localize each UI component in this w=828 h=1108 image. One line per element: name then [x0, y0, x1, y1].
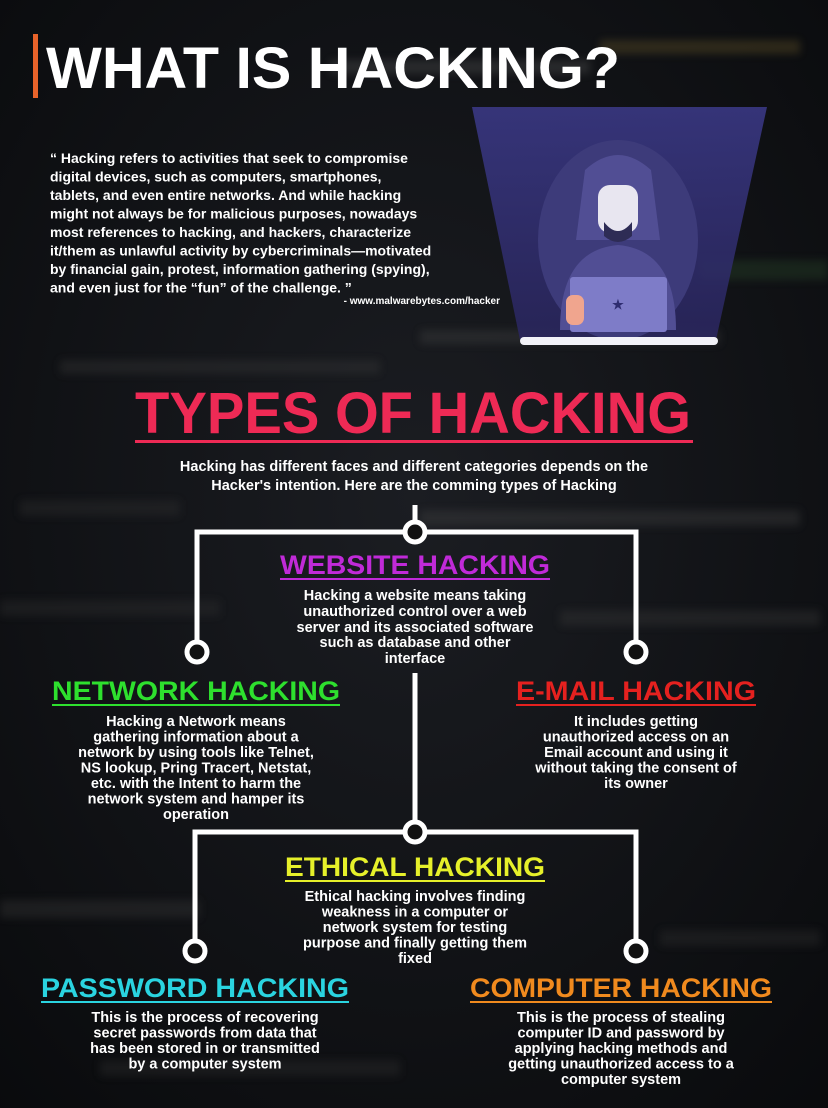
panel: network hacking: network by using tools like Telnet, — [78, 745, 314, 761]
text block: definition quote: and even just for the “fun” of the challenge. ” — [50, 280, 352, 296]
panel: network hacking: Hacking a Network means — [106, 714, 286, 730]
panel: network hacking: NETWORK HACKING — [52, 676, 340, 706]
text block: definition quote: it/them as unlawful activity by cybercriminals—motivated — [50, 242, 431, 258]
panel: password hacking: by a computer system — [128, 1056, 282, 1072]
panel: network hacking — [52, 676, 340, 823]
panel: network hacking: network system and hamper its — [88, 792, 304, 808]
connector tree: top — [187, 505, 646, 821]
icon: hooded hacker with laptop: ★ — [612, 297, 624, 312]
title: what is hacking: WHAT IS HACKING? — [46, 36, 620, 101]
panel: ethical hacking: Ethical hacking involves finding — [305, 889, 525, 905]
panel: e-mail hacking: It includes getting — [574, 714, 698, 730]
heading: types of hacking: TYPES OF HACKING — [135, 381, 691, 446]
source citation: - www.malwarebytes.com/hacker — [344, 296, 500, 307]
panel: website hacking: server and its associated software — [297, 620, 533, 636]
panel: password hacking: PASSWORD HACKING — [41, 973, 349, 1003]
panel: network hacking: NS lookup, Pring Tracert, Netstat, — [81, 760, 311, 776]
text block: intro — [180, 459, 648, 494]
panel: e-mail hacking: E-MAIL HACKING — [516, 676, 756, 706]
panel: website hacking: unauthorized control over a web — [303, 604, 527, 620]
panel: ethical hacking — [285, 852, 545, 967]
panel: ethical hacking: fixed — [398, 951, 432, 967]
panel: password hacking: This is the process of recovering — [91, 1010, 319, 1026]
text block: definition quote: digital devices, such as computers, smartphones, — [50, 168, 381, 184]
panel: e-mail hacking: without taking the consent of — [534, 760, 737, 776]
text block: definition quote: most references to hacking, and hackers, characterize — [50, 224, 411, 240]
text block: intro: Hacker's intention. Here are the comming types of Hacking — [211, 478, 617, 494]
icon: hooded hacker with laptop — [472, 107, 767, 345]
panel: network hacking: operation — [163, 807, 229, 823]
panel: website hacking — [280, 550, 550, 667]
panel: computer hacking: This is the process of stealing — [517, 1010, 725, 1026]
panel: ethical hacking: network system for testing — [323, 920, 507, 936]
panel: password hacking: secret passwords from data that — [93, 1026, 317, 1042]
text block: definition quote: might not always be for malicious purposes, nowadays — [50, 206, 417, 222]
text block: definition quote — [50, 150, 500, 307]
panel: ethical hacking: purpose and finally getting them — [303, 936, 527, 952]
panel: computer hacking: computer ID and password by — [517, 1026, 725, 1042]
panel: computer hacking: COMPUTER HACKING — [470, 973, 772, 1003]
panel: computer hacking — [470, 973, 772, 1088]
panel: computer hacking: applying hacking methods and — [515, 1041, 727, 1057]
panel: website hacking: such as database and other — [320, 635, 511, 651]
panel: website hacking: interface — [385, 651, 445, 667]
panel: computer hacking: getting unauthorized access to a — [508, 1056, 735, 1072]
panel: e-mail hacking: Email account and using it — [544, 745, 728, 761]
panel: ethical hacking: weakness in a computer or — [321, 904, 508, 920]
panel: password hacking — [41, 973, 349, 1072]
text block: definition quote: by financial gain, protest, information gathering (spying), — [50, 261, 430, 277]
panel: website hacking: WEBSITE HACKING — [280, 550, 550, 580]
panel: e-mail hacking: its owner — [604, 776, 668, 792]
text block: definition quote: “ Hacking refers to activities that seek to compromise — [50, 150, 408, 166]
panel: ethical hacking: ETHICAL HACKING — [285, 852, 545, 882]
panel: password hacking: has been stored in or transmitted — [90, 1041, 320, 1057]
panel: e-mail hacking — [516, 676, 756, 792]
panel: network hacking: gathering information about a — [93, 730, 300, 746]
panel: website hacking: Hacking a website means taking — [304, 588, 526, 604]
text block: intro: Hacking has different faces and different categories depends on the — [180, 459, 648, 475]
connector tree: bottom — [185, 822, 646, 961]
panel: e-mail hacking: unauthorized access on an — [543, 730, 729, 746]
text block: definition quote: tablets, and even entire networks. And while hacking — [50, 187, 401, 203]
panel: computer hacking: computer system — [561, 1072, 681, 1088]
panel: network hacking: etc. with the Intent to harm the — [91, 776, 301, 792]
